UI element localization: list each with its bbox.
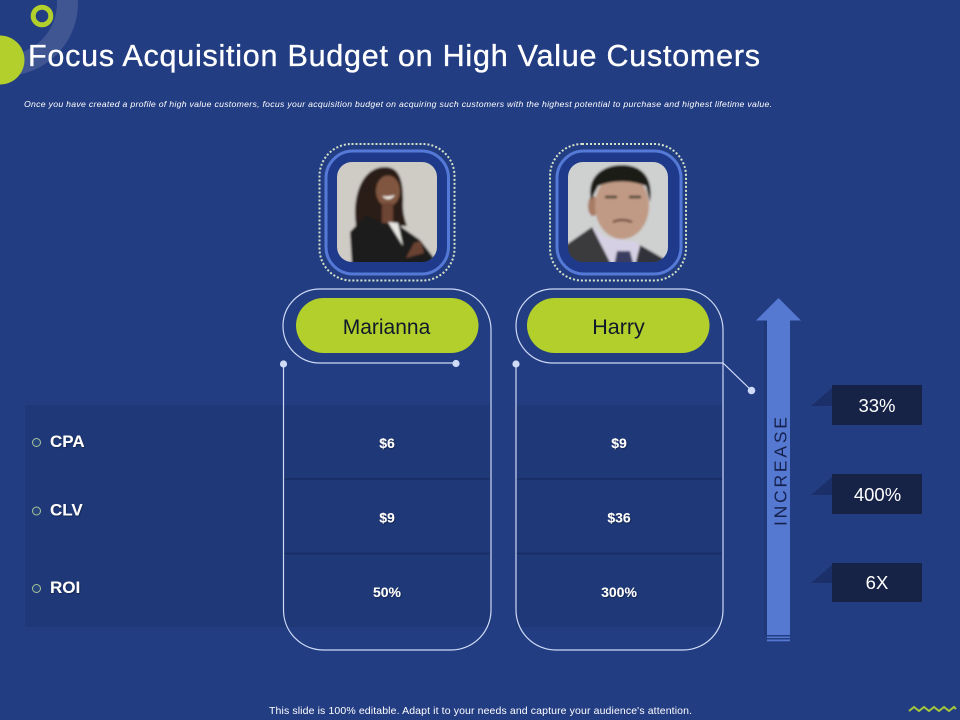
row label: CPA: CPA: [50, 432, 85, 451]
footer text: This slide is 100% editable. Adapt it to your needs and capture your audience's attention.: [269, 705, 692, 717]
table values: Harry: $9: [611, 435, 627, 451]
name pill: Marianna: Marianna: [343, 316, 431, 339]
name pill: Harry: [527, 298, 710, 353]
arrow: increase: [756, 298, 801, 641]
outline: Harry column: [512, 289, 755, 650]
icon: zigzag wave: [909, 707, 956, 711]
row label: CLV: CLV: [50, 500, 83, 520]
callout: 33%: [811, 385, 922, 425]
name pill: Harry: Harry: [592, 315, 645, 339]
callout: 6X: [811, 563, 922, 602]
row label: ROI: [32, 578, 80, 597]
title: Focus Acquisition Budget on High Value Customers: [28, 39, 760, 73]
decoration: top-left circles: [0, 0, 68, 84]
subtitle text: Once you have created a profile of high value customers, focus your acquisition budget on acquiring such customers with the highest potential to purchase and highest lifetime value.: [24, 99, 772, 109]
callout: 400%: [811, 474, 922, 514]
row label: ROI: ROI: [50, 578, 80, 597]
panel: metrics table band: [25, 405, 722, 627]
callout: 33%: 33%: [858, 395, 896, 416]
callout: 400%: 400%: [854, 484, 901, 505]
row label: CPA: [32, 432, 85, 451]
row label: CLV: [32, 500, 83, 520]
table values: Harry: [601, 435, 637, 600]
photo frame: Harry: [550, 144, 686, 280]
portrait: Marianna: [335, 160, 439, 266]
portrait: Harry: [566, 160, 670, 266]
table values: Harry: $36: [607, 510, 631, 526]
arrow: increase: INCREASE: [770, 417, 790, 526]
outline: Marianna column: [280, 289, 491, 650]
name pill: Marianna: [296, 298, 478, 353]
table values: Harry: 300%: [601, 584, 637, 600]
table values: Marianna: $6: [379, 435, 395, 451]
callout: 6X: 6X: [866, 572, 888, 593]
table values: Marianna: $9: [379, 510, 395, 526]
table values: Marianna: 50%: [373, 584, 402, 600]
table values: Marianna: [373, 435, 402, 600]
photo frame: Marianna: [320, 144, 454, 280]
